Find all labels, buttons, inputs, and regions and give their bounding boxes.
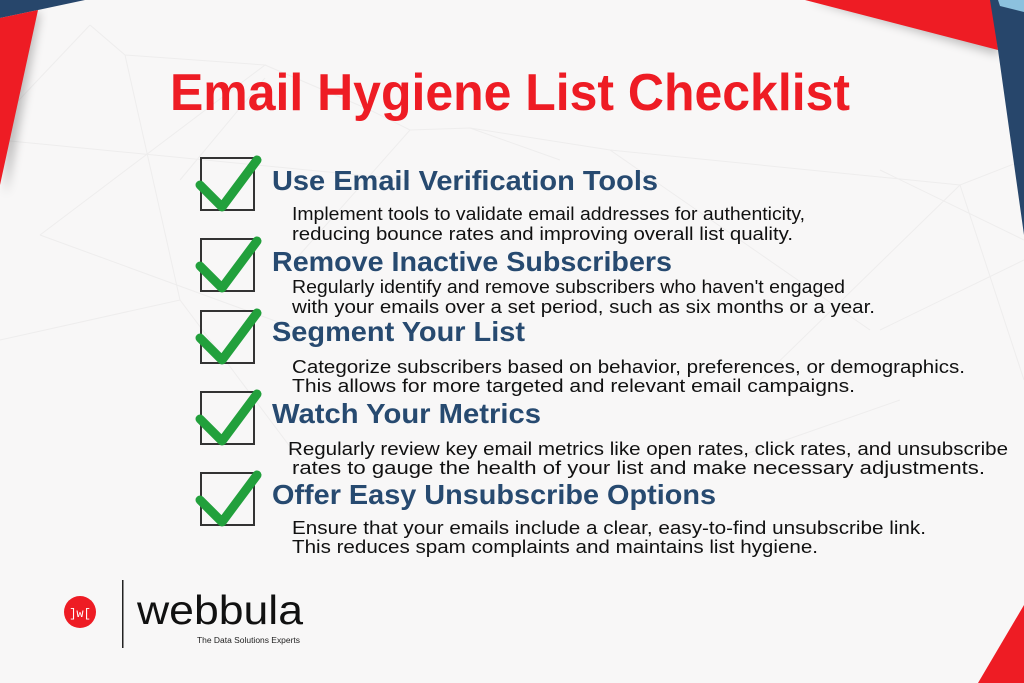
body 5: This reduces spam complaints and maintains list hygiene. bbox=[292, 537, 818, 557]
body 2: Regularly identify and remove subscribers who haven't engaged bbox=[292, 277, 845, 297]
body 4: rates to gauge the health of your list and make necessary adjustments. bbox=[292, 458, 985, 478]
checkbox 5 bbox=[200, 473, 257, 525]
body 3: This allows for more targeted and relevant email campaigns. bbox=[292, 376, 855, 396]
body 5 bbox=[292, 518, 926, 557]
body 4 bbox=[288, 439, 1008, 478]
body 3: Categorize subscribers based on behavior, preferences, or demographics. bbox=[292, 357, 965, 377]
corner: top-right shapes bbox=[805, 0, 1024, 235]
item 1 bbox=[200, 158, 805, 244]
corner: top-left shapes bbox=[0, 0, 85, 195]
checkbox 1 bbox=[200, 158, 257, 210]
heading 5: Offer Easy Unsubscribe Options bbox=[272, 479, 716, 510]
corner: bottom-right red triangle bbox=[978, 605, 1024, 683]
body 4: Regularly review key email metrics like open rates, click rates, and unsubscribe bbox=[288, 439, 1008, 459]
heading 4: Watch Your Metrics bbox=[272, 398, 541, 429]
item 4 bbox=[200, 392, 1008, 478]
logo: webbula bbox=[64, 580, 303, 648]
checkbox 2 bbox=[200, 239, 257, 291]
logo icon: ]w[ bbox=[69, 607, 91, 621]
heading 2: Remove Inactive Subscribers bbox=[272, 246, 672, 277]
body 5: Ensure that your emails include a clear, easy-to-find unsubscribe link. bbox=[292, 518, 926, 538]
checkbox 3 bbox=[200, 311, 257, 363]
item 3 bbox=[200, 311, 965, 396]
heading 3: Segment Your List bbox=[272, 316, 525, 347]
body 3 bbox=[292, 357, 965, 396]
logo tagline: The Data Solutions Experts bbox=[197, 636, 300, 645]
body 2 bbox=[291, 277, 875, 317]
item 5 bbox=[200, 473, 926, 557]
body 2: with your emails over a set period, such as six months or a year. bbox=[291, 297, 875, 317]
item 2 bbox=[200, 239, 875, 317]
logo wordmark: webbula bbox=[136, 587, 303, 633]
logo icon bbox=[64, 596, 96, 628]
checkbox 4 bbox=[200, 392, 257, 444]
body 1 bbox=[292, 204, 805, 244]
body 1: Implement tools to validate email addresses for authenticity, bbox=[292, 204, 805, 224]
heading 1: Use Email Verification Tools bbox=[272, 165, 658, 196]
body 1: reducing bounce rates and improving overall list quality. bbox=[292, 224, 793, 244]
title: Email Hygiene List Checklist bbox=[170, 64, 850, 122]
